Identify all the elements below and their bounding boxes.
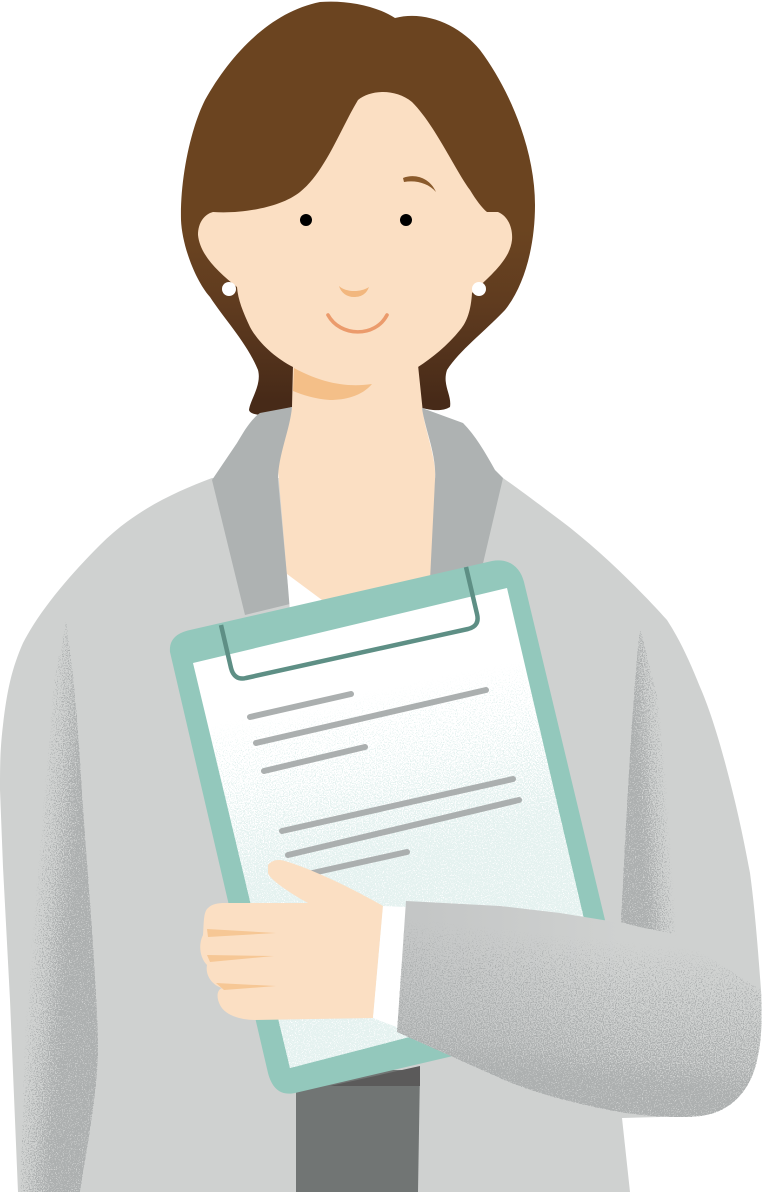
finger crease 1 [207,929,276,937]
trousers [296,1066,420,1192]
nose [339,286,369,297]
left sleeve shading [20,622,98,1192]
right eye [400,214,412,226]
finger crease 3 [216,983,276,990]
left lapel [212,407,292,615]
neck shadow [293,368,372,400]
hand [200,860,383,1020]
clipboard clip [221,567,478,679]
right sleeve shading [621,628,680,938]
jacket body and right arm [0,478,762,1192]
clipboard paper [193,588,590,1068]
palm and fingers [200,860,383,1020]
clipboard board [170,560,605,1094]
left earring [222,282,236,296]
blouse [287,574,322,612]
right earring [472,282,486,296]
finger crease 2 [207,955,274,962]
hair [181,2,535,415]
eyebrow [403,176,436,192]
sleeve grain shading [397,901,762,1117]
face [198,92,512,388]
right lapel [422,408,503,580]
mouth [328,315,387,332]
shirt cuff [373,906,406,1028]
clipboard [170,560,605,1094]
paper tint [193,588,590,1068]
neck [278,365,435,605]
forearm sleeve [397,901,762,1117]
paper text lines [250,690,519,878]
left eye [300,214,312,226]
